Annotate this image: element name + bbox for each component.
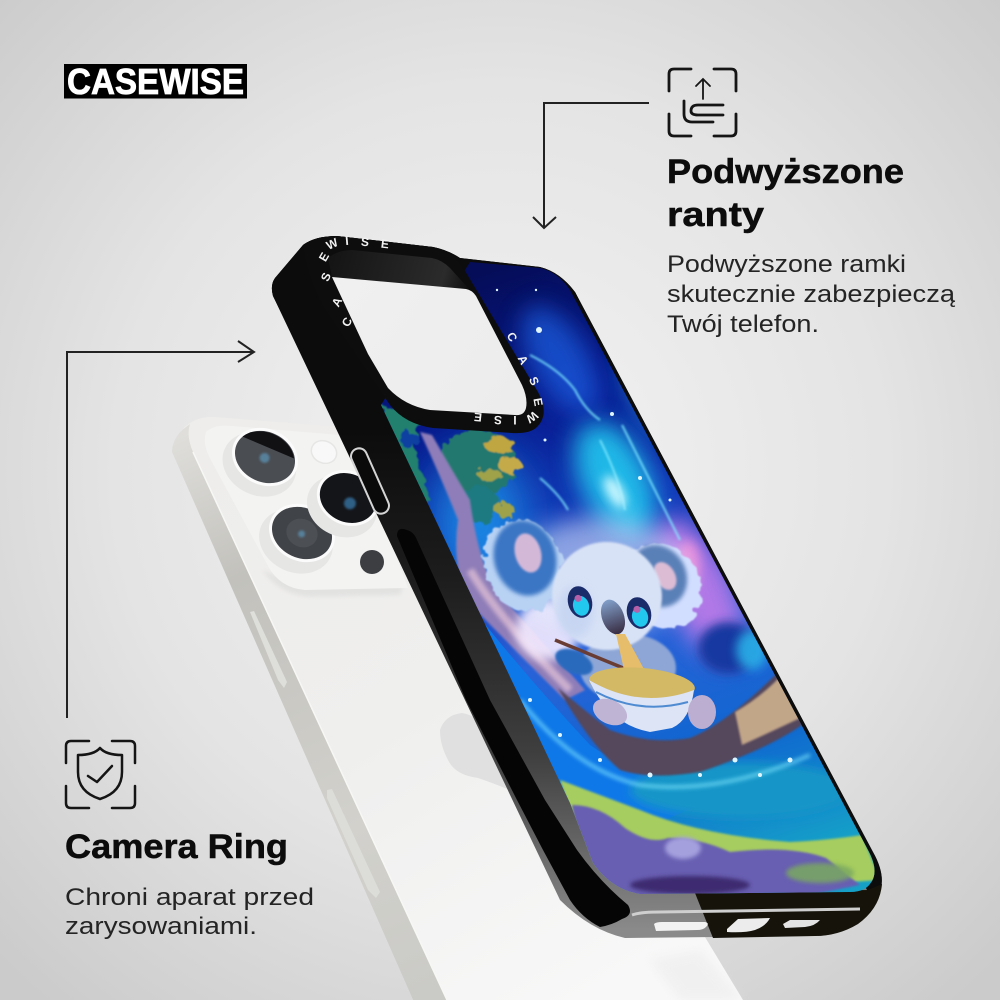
logo — [64, 61, 247, 102]
left ear fur — [480, 518, 565, 612]
bowl inside — [588, 663, 696, 705]
wave highlight — [520, 700, 810, 787]
text: camera ring description: zarysowaniami. — [65, 913, 257, 940]
lower lip highlight — [632, 909, 860, 915]
heading: raised edges: Podwyższone — [667, 153, 904, 191]
rocks highlight — [665, 837, 701, 859]
volume switch — [348, 446, 392, 516]
ring lettering: C — [339, 315, 355, 329]
teal glow — [558, 409, 672, 551]
trunk glow — [470, 570, 570, 690]
heading: raised edges: ranty — [667, 196, 764, 234]
arm — [551, 644, 597, 680]
lens top — [212, 415, 309, 508]
ring lettering: W — [324, 235, 341, 253]
side edge highlight — [193, 452, 447, 1000]
koala — [474, 510, 717, 732]
arrow: to raised edges — [533, 103, 649, 228]
sky base — [370, 255, 890, 905]
ring lettering: S — [318, 270, 334, 284]
icon: shield — [66, 741, 135, 808]
lens right — [297, 457, 390, 549]
head shade — [557, 586, 593, 638]
lilac glow — [516, 600, 580, 660]
teal glow right — [608, 364, 652, 444]
grass sky blend — [630, 762, 850, 818]
bowl stripe — [596, 692, 688, 707]
branch — [558, 674, 802, 777]
ring lettering — [316, 234, 546, 427]
chopsticks — [555, 640, 628, 670]
white phone behind the case — [172, 415, 743, 1000]
purple nebula — [644, 504, 752, 674]
tree trunk — [420, 432, 585, 700]
bottom port charging — [727, 918, 770, 932]
bowl — [589, 680, 694, 732]
sensor — [360, 550, 384, 574]
right thin black bezel — [570, 292, 882, 892]
logo text: CASEWISE — [67, 61, 244, 102]
blue glow near the tree — [435, 450, 525, 590]
text: camera ring description: Chroni aparat przed — [65, 884, 314, 911]
right dark shape — [698, 622, 758, 674]
streak lines — [530, 355, 680, 540]
ring lettering: I — [345, 234, 349, 248]
ring lettering: A — [515, 353, 531, 367]
lens bottom — [248, 491, 346, 585]
stars and sparks — [496, 289, 822, 778]
pink nebula — [676, 541, 700, 589]
right ear fur — [634, 542, 704, 630]
text: raised edges description: Twój telefon. — [667, 311, 819, 338]
ring lettering: S — [494, 413, 502, 427]
left ear — [490, 519, 560, 598]
logo mark — [440, 713, 510, 790]
side button lower — [327, 789, 380, 898]
text: camera ring description — [65, 884, 314, 940]
bottom port mic — [783, 920, 820, 928]
upper blue glow — [508, 294, 609, 421]
camera plateau — [205, 426, 408, 590]
text: raised edges description — [667, 251, 955, 338]
noodles — [616, 634, 652, 688]
heading: raised edges — [667, 153, 904, 234]
tree foliage — [382, 405, 522, 523]
text: raised edges description: skutecznie zabezpieczą — [667, 281, 955, 308]
ring lettering: E — [473, 410, 483, 424]
camera plateau shadow — [262, 570, 405, 597]
phone side edge — [172, 424, 447, 1000]
ring lettering: C — [504, 330, 520, 344]
left ear inner — [512, 532, 544, 574]
cyan burst — [599, 472, 631, 512]
right ear inner — [653, 560, 678, 592]
blue lower left — [484, 624, 684, 820]
ring lettering: W — [523, 408, 541, 426]
nose — [597, 596, 629, 638]
left eye — [568, 586, 592, 618]
ring lettering: S — [526, 374, 542, 388]
case body — [272, 236, 882, 938]
ring lettering: E — [530, 397, 546, 407]
head — [552, 540, 664, 652]
lower shade — [650, 950, 743, 1000]
body — [580, 636, 678, 696]
camera opening — [332, 277, 526, 415]
phone case — [272, 234, 890, 938]
right paw — [688, 695, 716, 729]
upper black part — [272, 236, 640, 430]
branch light end — [734, 678, 799, 746]
head glow — [512, 517, 688, 633]
camera opening wall — [328, 250, 470, 290]
flash — [308, 437, 340, 467]
dark section at the lower right — [695, 884, 882, 938]
screen artwork — [370, 255, 890, 905]
right cyan shape — [736, 630, 768, 670]
rock foliage — [786, 863, 854, 883]
side button upper — [250, 611, 287, 688]
bottom port speaker — [654, 922, 708, 931]
logo box — [64, 64, 247, 98]
rocks — [572, 805, 860, 897]
ring lettering: S — [360, 235, 370, 249]
text: raised edges description: Podwyższone ramki — [667, 251, 906, 278]
rocks shade — [630, 876, 750, 894]
ring lettering: E — [316, 250, 332, 264]
arrow: to camera ring — [67, 341, 254, 718]
ring lettering: E — [380, 237, 390, 251]
left paw — [589, 694, 631, 730]
heading: camera ring: Camera Ring — [65, 828, 288, 866]
icon: raised edge — [669, 69, 736, 136]
ring lettering: A — [329, 295, 345, 309]
camera ring — [303, 236, 544, 433]
right eye — [623, 594, 655, 632]
ring lettering: I — [513, 413, 517, 427]
grass — [560, 780, 880, 900]
right ear — [636, 542, 690, 610]
black side strip — [397, 529, 630, 927]
phone back — [172, 417, 743, 1000]
